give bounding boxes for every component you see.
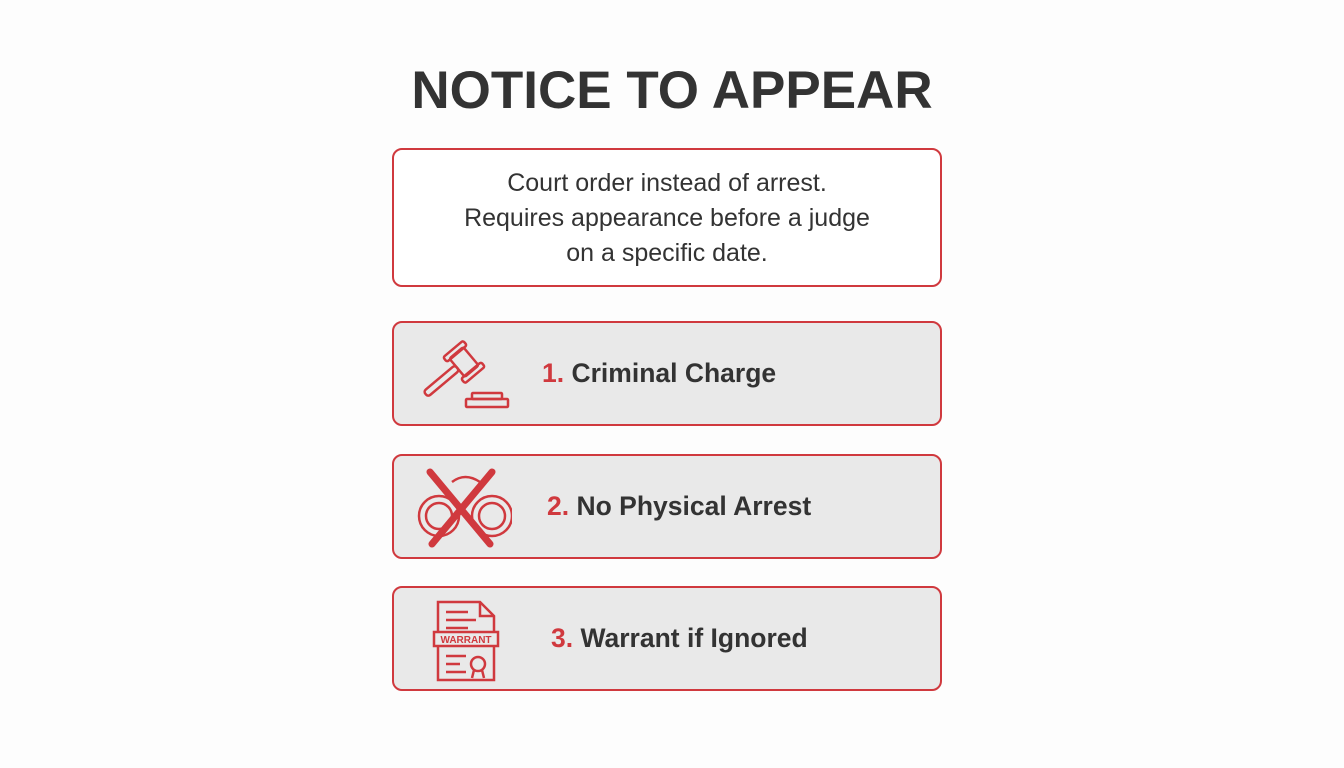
- row 2: no physical arrest: [392, 454, 942, 559]
- description box: Requires appearance before a judge: [464, 204, 870, 232]
- description box: on a specific date.: [566, 239, 768, 267]
- row 1: criminal charge: [392, 321, 942, 426]
- description box: Court order instead of arrest.: [507, 169, 827, 197]
- label: 3. Warrant if Ignored: [551, 623, 808, 653]
- title: NOTICE TO APPEAR: [411, 61, 933, 120]
- label: 1. Criminal Charge: [542, 358, 776, 388]
- label: 2. No Physical Arrest: [547, 491, 811, 521]
- icon: warrant document: [432, 600, 500, 682]
- icon: gavel: [423, 340, 510, 408]
- icon: crossed handcuffs: [418, 468, 512, 548]
- icon: warrant document: WARRANT: [440, 635, 492, 646]
- description box: [392, 148, 942, 287]
- row 3: warrant if ignored: [392, 586, 942, 691]
